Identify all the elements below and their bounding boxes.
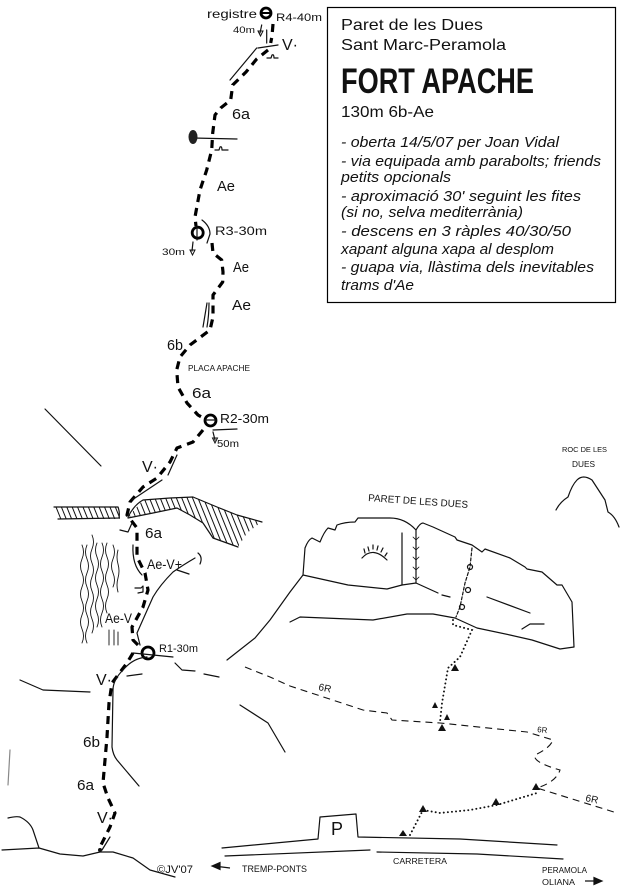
text block: route notes: - oberta 14/5/07 per Joan Vidal [341,134,560,151]
belay: R2: R2-30m [220,411,269,426]
route on overview [456,548,472,617]
path: dotted approach with cairns [399,620,540,836]
path: GR trail dashed: 6R [537,725,548,735]
path: GR trail dashed: 6R [317,682,332,696]
panel: route information [328,8,616,302]
text block: route notes: - via equipada amb parabolts; friends [341,153,602,170]
label: Peramola: PERAMOLA [542,865,587,875]
grade labels: upper pitches [167,106,251,402]
ground and base lines [2,663,285,877]
text block: route notes: trams d'Ae [341,277,414,294]
arrow: left [212,862,230,870]
label: Roc de les Dues with peak [556,445,619,527]
grade labels: lower pitches: V· [96,672,112,689]
belay: R1: R1-30m [159,643,198,655]
heading: location: Paret de les Dues [341,17,483,34]
ledge with bush [188,130,237,150]
grade labels: middle pitches [105,459,182,626]
belay: R3: R3-30m [215,224,267,238]
route line: dashed climbing line [100,24,273,847]
belay: R3: 30m [162,247,185,257]
copyright: ©JV'07 [157,864,193,876]
icon: overhang arc [362,545,387,560]
text block: route notes: xapant alguna xapa al desplom [340,241,554,258]
icon: bolted crack line [413,537,419,580]
grade labels: upper pitches: Ae [232,297,251,314]
title: FORT APACHE [341,62,534,101]
road and parking [212,814,602,886]
grade labels: upper pitches: 6b [167,337,183,354]
grade labels: upper pitches: 6a [192,385,212,402]
thin rock lines: central wall [120,455,201,645]
heading: location [341,17,506,54]
text block: route notes: - aproximació 30' seguint les fites [341,188,582,205]
text block: route notes: - guapa via, llàstima dels inevitables [341,259,595,276]
subtitle: length and grade: 130m 6b-Ae [341,104,434,121]
grade labels: lower pitches [77,672,113,827]
arrow: right [585,878,602,884]
grade labels: upper pitches: Ae [217,178,235,195]
roof outline: right [128,497,262,547]
label: 40m: 40m [233,25,255,35]
label: Roc de les Dues with peak: DUES [572,459,595,469]
label: registre: registre [207,7,257,21]
grade labels: upper pitches: PLACA APACHE [188,364,250,373]
label: parking: P [331,819,343,839]
belay: R2: 50m [217,439,239,450]
cliff sketch: Paret de les Dues [227,518,574,660]
icon: cairns [399,664,540,836]
label: Paret de les Dues: PARET DE LES DUES [368,493,469,511]
path: GR trail dashed: 6R [584,793,599,807]
label: V: V· [282,37,298,54]
label: carretera: CARRETERA [393,856,447,866]
path: GR trail dashed [245,667,617,813]
belay: R2 [205,411,269,450]
label: R4: R4-40m [276,12,322,24]
belay: R1 [112,643,198,786]
belay: R3 [162,220,267,327]
roof: hatched overhang left [55,507,120,519]
text block: route notes: (si no, selva mediterrània) [341,204,523,221]
grade labels: upper pitches: 6a [232,106,251,123]
grade labels: upper pitches: Ae [233,259,249,276]
wet wall: wavy streaks [80,535,119,645]
text block: route notes: petits opcionals [340,169,452,186]
grade labels: middle pitches: Ae-V+ [147,556,182,572]
grade labels: middle pitches: 6a [145,525,163,542]
rock line: left slope [45,409,101,466]
grade labels: lower pitches: 6b [83,734,100,751]
text block: route notes: - descens en 3 ràples 40/30/50 [341,223,572,240]
roof: hatched overhang right [128,497,262,547]
label: Tremp-Ponts: TREMP-PONTS [242,864,307,874]
label: Roc de les Dues with peak: ROC DE LES [562,445,607,454]
heading: location: Sant Marc-Peramola [341,37,506,54]
grade labels: lower pitches: 6a [77,777,95,794]
grade labels: middle pitches: V· [142,459,158,476]
text block: route notes [340,134,602,294]
grade labels: lower pitches: V· [97,810,113,827]
belay: R4 with logbook [207,7,322,80]
grade labels: middle pitches: Ae-V [105,610,133,626]
roof outline: left [54,507,119,519]
